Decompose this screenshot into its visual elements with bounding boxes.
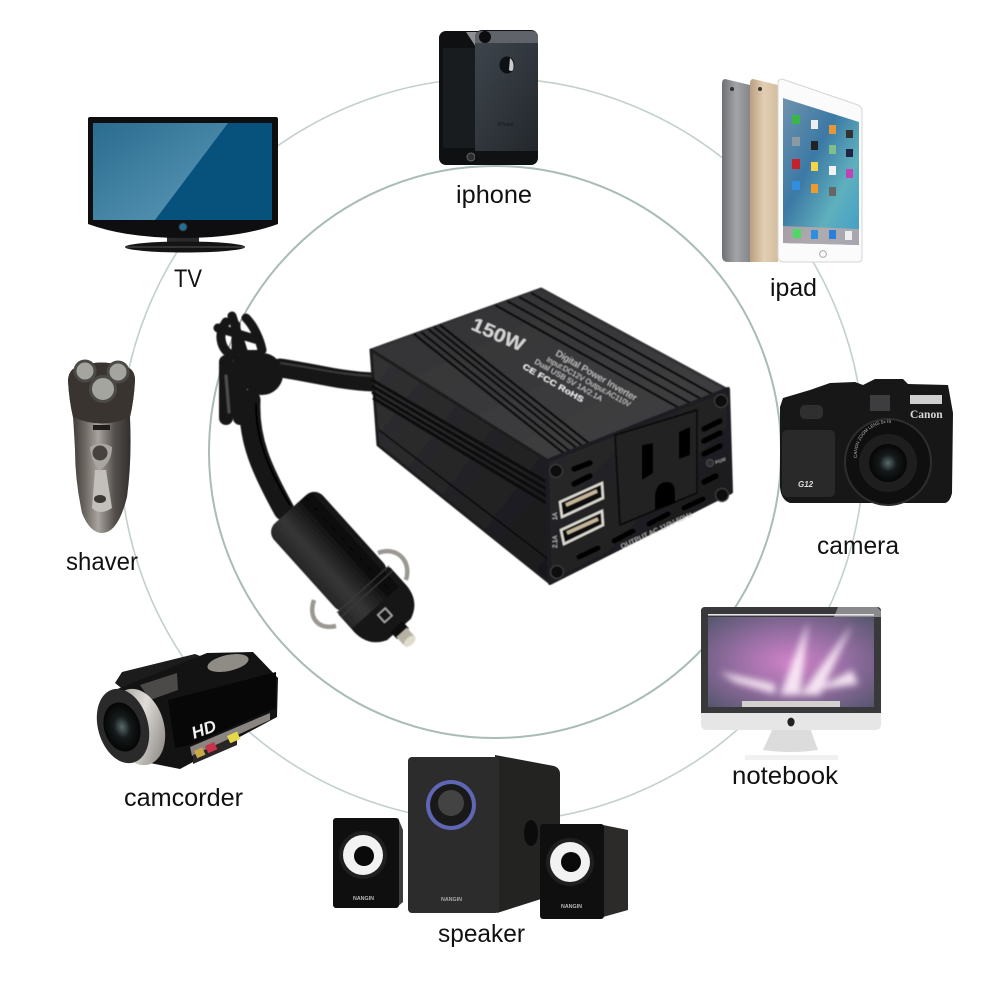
icon: TV <box>88 117 278 252</box>
outer ring connecting devices <box>120 78 864 822</box>
label: iphone: iphone <box>456 181 532 209</box>
label: camcorder: camcorder <box>124 784 243 812</box>
USB ports <box>560 483 603 544</box>
screws and vents <box>550 394 728 578</box>
head housing <box>68 362 135 424</box>
icon: iphone <box>439 30 538 165</box>
label: ipad: ipad <box>770 274 817 302</box>
front phone <box>439 31 499 165</box>
inverter top face <box>371 289 728 462</box>
output label: OUTPUT AC 110V-60Hz <box>620 511 694 551</box>
camera body <box>780 379 953 503</box>
chassis <box>701 607 881 730</box>
top grey panel <box>140 673 178 700</box>
white ipad <box>778 79 862 262</box>
feature stripe <box>190 713 270 756</box>
flash <box>910 395 942 404</box>
control dial <box>206 651 250 675</box>
lens barrel <box>102 682 174 772</box>
power LED <box>706 460 714 466</box>
inverter side face <box>371 350 550 583</box>
camcorder body <box>115 652 278 769</box>
label: inverter specs <box>521 348 639 409</box>
label: speaker: speaker <box>438 920 525 948</box>
subwoofer front <box>408 757 499 913</box>
icon: camcorder: HD <box>189 716 219 743</box>
side ribs <box>372 380 548 559</box>
label: inverter specs: CE FCC RoHS <box>521 362 586 405</box>
shaver body <box>68 362 135 533</box>
inverter front face <box>547 389 731 583</box>
icon: camcorder <box>88 651 278 772</box>
icon: speakers: NANGIN <box>441 897 462 903</box>
subwoofer side <box>495 755 560 913</box>
keyboard hint <box>745 755 838 760</box>
display panel <box>168 672 276 748</box>
right speaker <box>603 825 628 917</box>
label: TV: TV <box>174 265 202 293</box>
power cable with knot <box>218 316 374 510</box>
icon: car power inverter with cigarette plug <box>218 289 731 668</box>
top ribs <box>414 293 714 455</box>
icon: ipad <box>722 79 862 262</box>
TV bezel <box>88 117 278 238</box>
ipad screen <box>783 98 859 245</box>
label: 150W: 150W <box>468 314 528 356</box>
strap <box>115 654 210 695</box>
label: notebook: notebook <box>732 762 839 790</box>
aurora rays <box>720 622 858 695</box>
plug clips <box>312 551 407 627</box>
TV screen <box>93 123 272 220</box>
back phone <box>475 30 538 165</box>
apple logo <box>500 56 514 74</box>
dock <box>742 701 840 707</box>
icon: speakers <box>333 755 628 919</box>
TV stand <box>167 235 199 245</box>
power button <box>90 444 112 470</box>
label: camera: camera <box>817 532 899 560</box>
mode dial <box>800 405 823 419</box>
model text: iPhone <box>498 122 514 128</box>
USB ratings: 1A <box>553 513 559 520</box>
left speaker <box>396 818 403 908</box>
icon: speakers: NANGIN <box>353 896 374 902</box>
bezel <box>701 607 881 713</box>
icon: shaver <box>68 361 135 533</box>
icon: notebook <box>701 607 881 760</box>
lens <box>845 419 931 505</box>
apple logo <box>787 718 795 726</box>
icon: camera <box>780 379 953 506</box>
label: shaver: shaver <box>66 548 138 576</box>
label: inverter specs: Input:DC12V Output:AC110V <box>545 355 632 409</box>
app icons <box>792 115 853 240</box>
icon: car power inverter with cigarette plug: POW <box>715 456 727 465</box>
gray ipad <box>722 79 750 262</box>
brand: Canon <box>910 409 943 421</box>
woofer <box>426 780 476 830</box>
icon: car power inverter with cigarette plug: 2.1A <box>553 536 559 548</box>
gold ipad <box>750 79 778 262</box>
shaving heads <box>75 361 128 402</box>
inner ring around inverter <box>209 166 781 738</box>
icon: camera: CANON ZOOM LENS 5x IS <box>854 420 891 458</box>
icon: speakers: NANGIN <box>561 904 582 910</box>
AC socket <box>615 410 697 525</box>
stand <box>763 728 818 752</box>
cigarette plug <box>265 486 438 668</box>
icon: camera: G12 <box>798 480 814 489</box>
screen <box>708 617 874 707</box>
label: inverter specs: Dual USB 5V 1A/2.1A <box>533 357 604 403</box>
label: inverter specs: Digital Power Inverter <box>554 348 639 403</box>
